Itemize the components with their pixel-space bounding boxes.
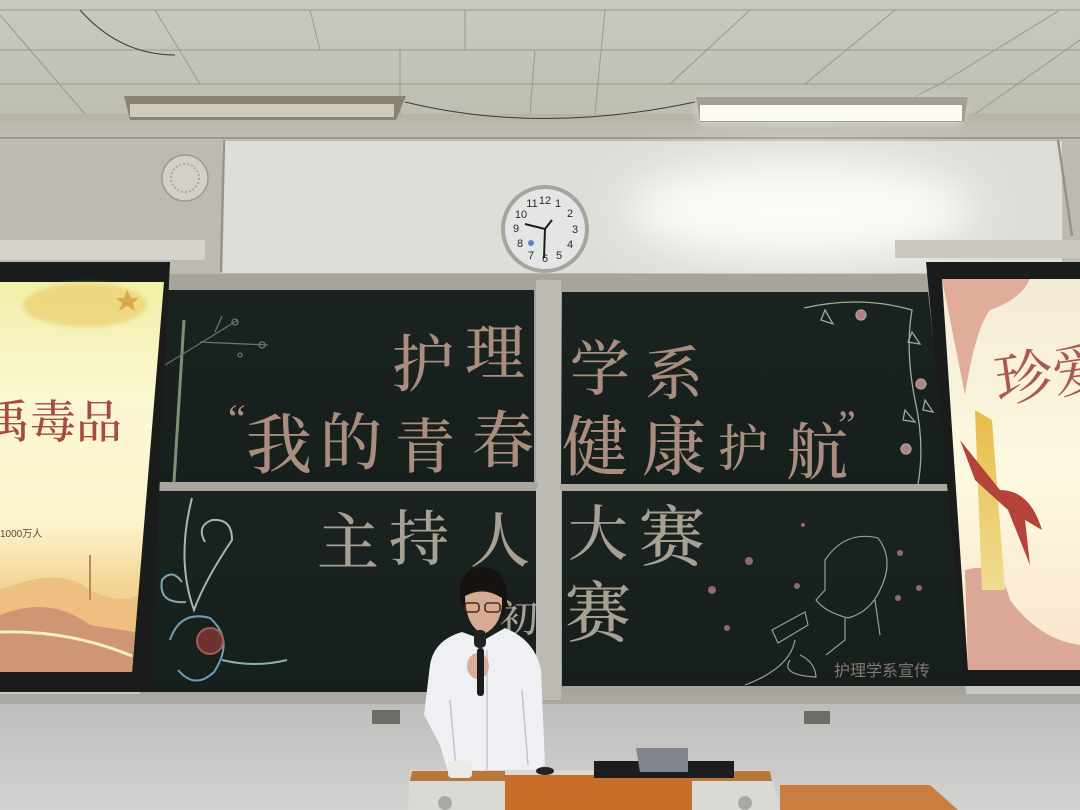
chalk drawing: portrait and microphone (708, 523, 922, 685)
heading: host contest: 赛 (639, 502, 707, 575)
heading: department: 理 (465, 321, 525, 387)
screen text: small figure: 1000万人 (0, 528, 42, 540)
left projector screen (0, 262, 170, 692)
ceiling (0, 0, 1080, 140)
wall clock: 9 (513, 223, 519, 235)
heading: host contest: 大 (568, 502, 628, 568)
heading: title: 青 (395, 415, 455, 481)
wall clock: 5 (556, 250, 562, 262)
presenter (424, 567, 545, 772)
wall clock: 8 (517, 238, 523, 250)
heading: title: 护 (718, 421, 768, 477)
heading: title: “ (228, 396, 246, 441)
heading: department: 学 (570, 337, 630, 403)
heading: host contest: 人 (470, 509, 530, 575)
heading: host contest: 赛 (565, 578, 633, 651)
hand and microphone (467, 653, 489, 679)
chalk signature: 护理学系宣传 (834, 662, 930, 680)
heading: title: 的 (320, 410, 382, 478)
podium (408, 748, 958, 810)
heading: title: 我 (246, 410, 312, 483)
chalk drawing: branch (165, 316, 268, 482)
wall clock: 4 (567, 239, 573, 251)
wall clock: 2 (567, 208, 573, 220)
heading: department (392, 321, 703, 407)
right projector screen (895, 240, 1080, 686)
chalk drawing: flower vine (804, 302, 933, 484)
heading: host contest: 持 (389, 507, 449, 573)
chalk drawing: floral swirl (162, 498, 287, 681)
blackboard panels (136, 290, 968, 692)
heading: department: 护 (392, 332, 454, 400)
ceiling light left (124, 96, 406, 120)
upper wall (0, 140, 1080, 275)
heading: title: 航 (786, 420, 848, 488)
wall clock: 10 (515, 209, 527, 221)
hair (460, 567, 507, 618)
heading: title (228, 396, 856, 488)
wall clock: 12 (539, 195, 551, 207)
wall clock: 1 (555, 198, 561, 210)
lower wall (0, 700, 1080, 810)
heading: host contest (317, 502, 707, 651)
ceiling light right (696, 97, 968, 122)
heading: department: 系 (645, 342, 703, 407)
heading: host contest: 主 (317, 510, 379, 578)
wall sockets (372, 710, 830, 724)
heading: title: ” (838, 402, 856, 447)
heading: title: 康 (642, 413, 706, 484)
smoke detector (162, 155, 208, 201)
heading: title: 春 (472, 408, 534, 476)
shirt (424, 628, 545, 772)
heading: title: 健 (562, 412, 628, 485)
wall clock: 6 (542, 253, 548, 265)
wall clock: 11 (526, 198, 538, 210)
glasses (465, 603, 500, 612)
wall clock: 3 (572, 224, 578, 236)
wall clock (501, 185, 589, 273)
heading: host contest: 初 (500, 599, 538, 641)
wall clock: 7 (528, 250, 534, 262)
blackboard frame (0, 274, 1080, 704)
face (465, 591, 502, 634)
